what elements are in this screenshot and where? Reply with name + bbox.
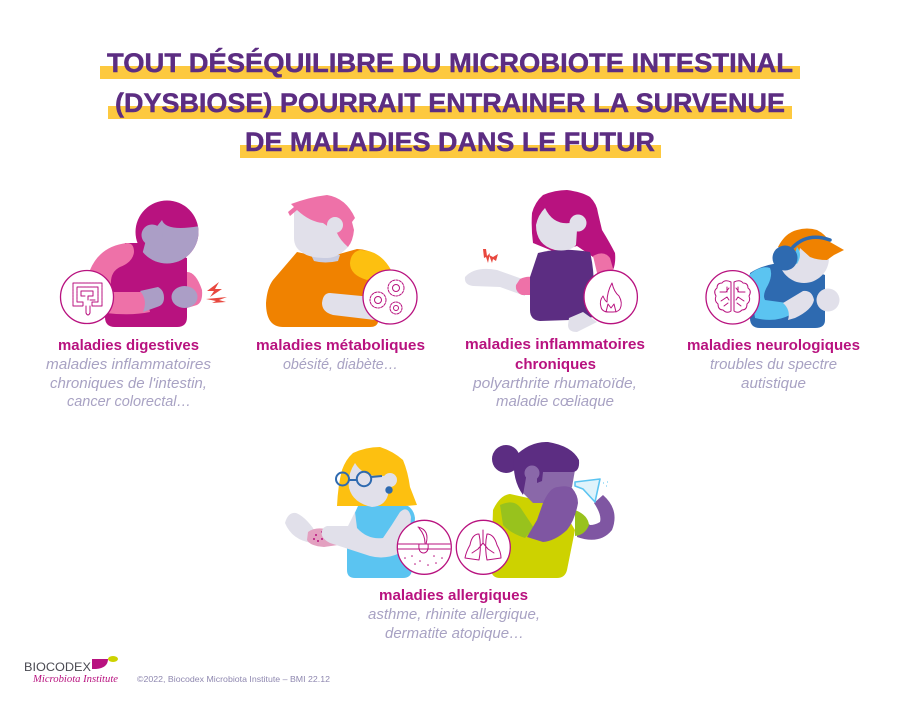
figure: digestive person [90,200,202,327]
title: DE MALADIES DANS LE FUTUR [245,127,655,157]
panel: maladies inflammatoires chroniques [465,190,645,410]
logo: Biocodex Microbiota Institute: Microbiota Institute [32,674,119,685]
figure: neurological person [749,228,844,328]
heading: maladies digestives [58,337,199,354]
panel: maladies digestives [46,200,227,410]
heading: chroniques [515,356,596,373]
panel: maladies allergiques [285,442,615,642]
icon: pain bolts [206,282,227,303]
description: cancer colorectal… [67,393,191,410]
panel: maladies métaboliques [256,195,425,373]
icon: gears [363,270,417,324]
panel: maladies neurologiques [687,228,860,392]
heading: maladies métaboliques [256,337,425,354]
figure: metabolic person [266,195,392,327]
icon: pain bolts [483,249,498,263]
description [472,375,637,410]
description: maladie cœliaque [496,393,614,410]
heading: maladies neurologiques [687,337,860,354]
figure: inflammatory person [465,190,615,332]
description [46,356,212,410]
logo: Biocodex Microbiota Institute [24,656,119,685]
logo: Biocodex Microbiota Institute: BIOCODEX [24,662,91,674]
description [368,606,540,642]
copyright footer: ©2022, Biocodex Microbiota Institute – BMI 22.12 [137,674,330,684]
heading: maladies allergiques [379,587,528,604]
icon: flame [584,270,637,324]
description: polyarthrite rhumatoïde, [472,375,637,392]
description: asthme, rhinite allergique, [368,606,540,623]
title [100,47,800,158]
heading [465,336,645,373]
description: chroniques de l'intestin, [50,375,207,392]
icon: skin [397,520,451,574]
description: autistique [741,375,806,392]
figure: person with eczema [285,447,417,578]
icon: brain [706,271,759,324]
icon: lungs [456,520,510,574]
title: TOUT DÉSÉQUILIBRE DU MICROBIOTE INTESTINAL [107,47,793,78]
figure: sneezing person [491,442,615,578]
icon: intestine [60,270,114,324]
description: dermatite atopique… [385,625,524,642]
description [710,356,837,392]
title: (DYSBIOSE) POURRAIT ENTRAINER LA SURVENUE [115,88,785,118]
description: maladies inflammatoires [46,356,212,373]
heading: maladies inflammatoires [465,336,645,353]
description: obésité, diabète… [283,356,398,373]
description: troubles du spectre [710,356,837,373]
